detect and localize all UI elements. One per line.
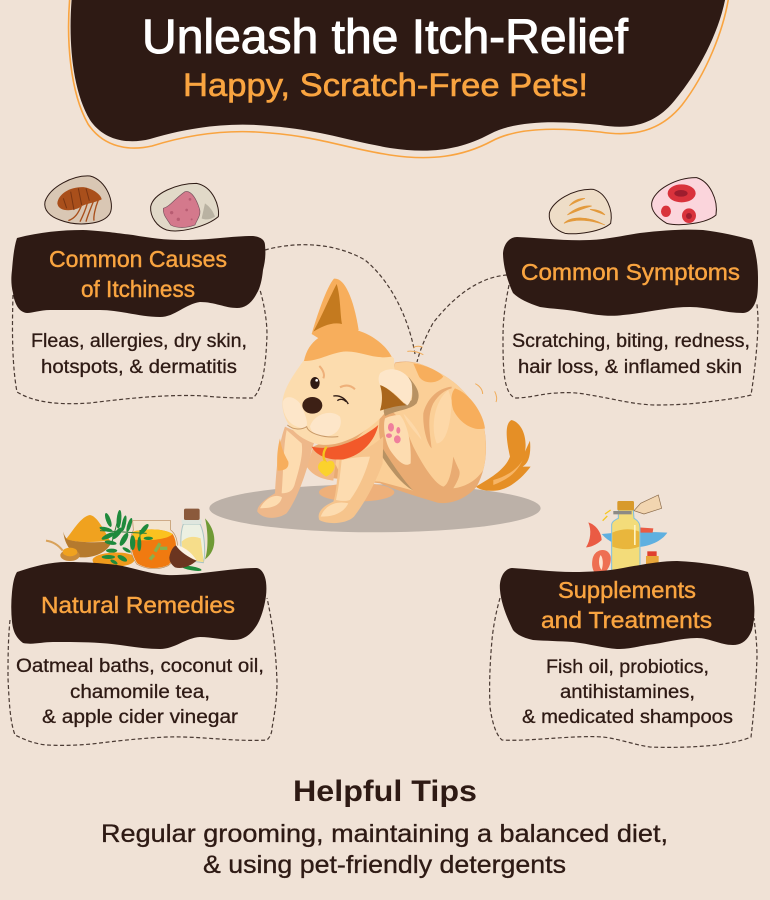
head cap [304, 328, 392, 361]
header blob: symptoms [503, 230, 758, 316]
left front leg [257, 427, 315, 518]
panel heading: supplements: and Treatments [541, 607, 712, 633]
panel text: causes [31, 330, 247, 378]
connector: symptoms to dog [417, 275, 507, 362]
helpful tips text: Regular grooming, maintaining a balanced diet, [101, 820, 668, 848]
brown shading strip [380, 447, 413, 491]
muzzle [283, 397, 341, 437]
helpful tips text: & using pet-friendly detergents [203, 851, 566, 879]
oil bottle [612, 510, 640, 573]
panel text: remedies: chamomile tea, [70, 681, 210, 703]
turmeric root [93, 552, 135, 567]
illustration: scratching dog [209, 279, 541, 532]
panel text: causes: Fleas, allergies, dry skin, [31, 330, 247, 352]
back foot [319, 483, 394, 502]
panel: natural remedies [8, 509, 277, 745]
header blob: supplements [500, 561, 754, 649]
motion marks [407, 346, 497, 402]
panel text: remedies: Oatmeal baths, coconut oil, [16, 655, 264, 677]
subtitle: Happy, Scratch-Free Pets! [183, 67, 588, 103]
icon: scratch marks [549, 189, 611, 234]
panel heading: supplements [541, 577, 712, 633]
floppy ear inner [380, 385, 406, 411]
tail [476, 420, 531, 491]
body light area [390, 362, 486, 488]
standing ear [312, 279, 359, 347]
pill jar [646, 556, 659, 571]
ear shadow [384, 377, 419, 416]
icon: fish oil and supplements [586, 495, 667, 573]
panel text: remedies: & apple cider vinegar [42, 706, 239, 728]
fish [602, 532, 667, 547]
palm leaf [205, 518, 214, 559]
panel text: remedies [16, 655, 264, 728]
chest [333, 417, 413, 491]
panel heading: causes: Common Causes [49, 246, 227, 272]
panel text: causes: hotspots, & dermatitis [41, 356, 237, 378]
panel text: symptoms [512, 330, 750, 378]
panel: common symptoms [503, 178, 758, 405]
helpful tips heading: Helpful Tips [293, 775, 477, 808]
fish tail [586, 522, 602, 547]
oil bottle [181, 524, 205, 563]
header blob: remedies [11, 562, 266, 649]
panel text: symptoms: Scratching, biting, redness, [512, 330, 750, 352]
helpful tips text [101, 820, 668, 879]
dashed outline: supplements [490, 598, 757, 747]
paw print [386, 423, 401, 443]
coconut [169, 545, 197, 568]
icon: remedy ingredients [46, 509, 214, 572]
panel heading: symptoms: Common Symptoms [521, 259, 740, 285]
body silhouette [313, 361, 486, 503]
eye open [310, 377, 320, 389]
panel heading: remedies: Natural Remedies [41, 592, 235, 618]
dashed outline: symptoms [503, 285, 758, 405]
salmon steak [592, 550, 611, 573]
eye winking [333, 396, 348, 404]
spoon [46, 541, 63, 551]
spark marks [603, 510, 611, 521]
panel text: supplements: & medicated shampoos [522, 706, 733, 728]
floppy ear flap [379, 369, 412, 405]
turmeric mound [66, 515, 110, 542]
fish oil tag [634, 495, 662, 514]
panel heading: causes: of Itchiness [81, 276, 195, 302]
back stripes [423, 387, 452, 448]
nose [302, 397, 322, 414]
panel text: supplements: Fish oil, probiotics, [546, 656, 709, 678]
panel heading: causes [49, 246, 227, 302]
chest shadow [307, 447, 337, 481]
dashed outline: remedies [8, 598, 277, 745]
header banner [69, 0, 729, 158]
icon: red skin sores [652, 178, 716, 225]
panel: common causes [11, 176, 267, 404]
icon: flea [45, 176, 111, 224]
panel: supplements and treatments [490, 495, 757, 747]
eyebrows [319, 366, 355, 389]
right front leg [319, 437, 383, 523]
ground shadow [209, 484, 541, 532]
neem sprig [99, 510, 202, 572]
body patches [413, 363, 485, 429]
icon: irritated skin [151, 183, 219, 231]
panel text: supplements [522, 656, 733, 728]
collar [312, 425, 378, 460]
title: Unleash the Itch-Relief [142, 11, 629, 64]
thigh with paw [384, 415, 411, 465]
honey jar [130, 521, 177, 569]
head [282, 344, 395, 445]
connector: causes to dog [265, 245, 415, 354]
panel text: supplements: antihistamines, [560, 681, 695, 703]
panel text: symptoms: hair loss, & inflamed skin [518, 356, 742, 378]
header blob: causes [11, 230, 265, 317]
dashed outline: causes [12, 290, 267, 404]
panel heading: supplements: Supplements [558, 577, 696, 603]
wooden bowl [63, 532, 112, 557]
heart tag [318, 447, 335, 477]
